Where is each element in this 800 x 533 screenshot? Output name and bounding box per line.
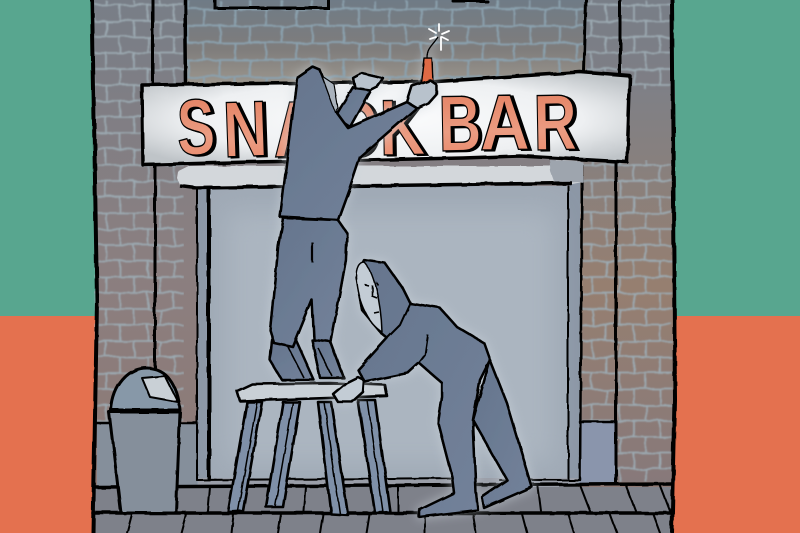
sign lettering: N <box>222 85 269 175</box>
plinths and door frame <box>97 170 617 487</box>
background: orange lower band <box>0 316 800 533</box>
torso and raised arm <box>280 67 417 220</box>
legs <box>270 218 347 347</box>
pavement <box>93 478 673 533</box>
line work: building <box>92 0 675 533</box>
sign board <box>142 72 630 165</box>
facial features <box>365 282 379 313</box>
bin flap <box>142 376 178 402</box>
step stool <box>228 383 390 515</box>
stool leg 1 <box>228 402 262 512</box>
dynamite stick <box>421 37 438 82</box>
trash bin <box>109 368 180 513</box>
sign lettering: A <box>479 78 530 167</box>
shutter roll housing <box>177 160 583 188</box>
stool leg 2 <box>266 402 300 507</box>
shutter glow <box>225 210 555 465</box>
background: teal upper band <box>0 0 800 316</box>
snack bar sign <box>142 72 630 175</box>
sign lettering: S <box>176 83 217 172</box>
back leg and shoe <box>473 360 532 508</box>
sign lettering: C <box>331 85 378 174</box>
stool leg 3 <box>318 402 348 515</box>
building wall <box>92 0 675 533</box>
shoelace lines <box>288 347 332 378</box>
bin dome <box>111 368 180 410</box>
body, hood, arm and front leg <box>356 260 490 517</box>
bin body <box>109 412 180 513</box>
sign lettering: B <box>438 79 482 168</box>
hood lining <box>322 76 338 112</box>
sleeve line <box>387 303 428 363</box>
stool seat <box>237 383 387 401</box>
sign lettering: K <box>379 84 426 173</box>
roller shutter <box>209 186 568 480</box>
stool leg 4 <box>358 400 390 513</box>
spark <box>429 24 449 50</box>
other arm <box>335 87 371 127</box>
hand on stool <box>333 377 364 402</box>
sign lettering <box>176 77 578 175</box>
face <box>356 262 382 332</box>
raised hand <box>407 80 436 108</box>
sign lettering: A <box>272 85 320 175</box>
sign lettering: R <box>533 77 578 167</box>
upper hand <box>353 73 383 90</box>
feet <box>270 340 314 380</box>
standing figure <box>270 37 438 380</box>
stool leg stripes <box>238 400 383 514</box>
leaning figure <box>333 260 532 517</box>
